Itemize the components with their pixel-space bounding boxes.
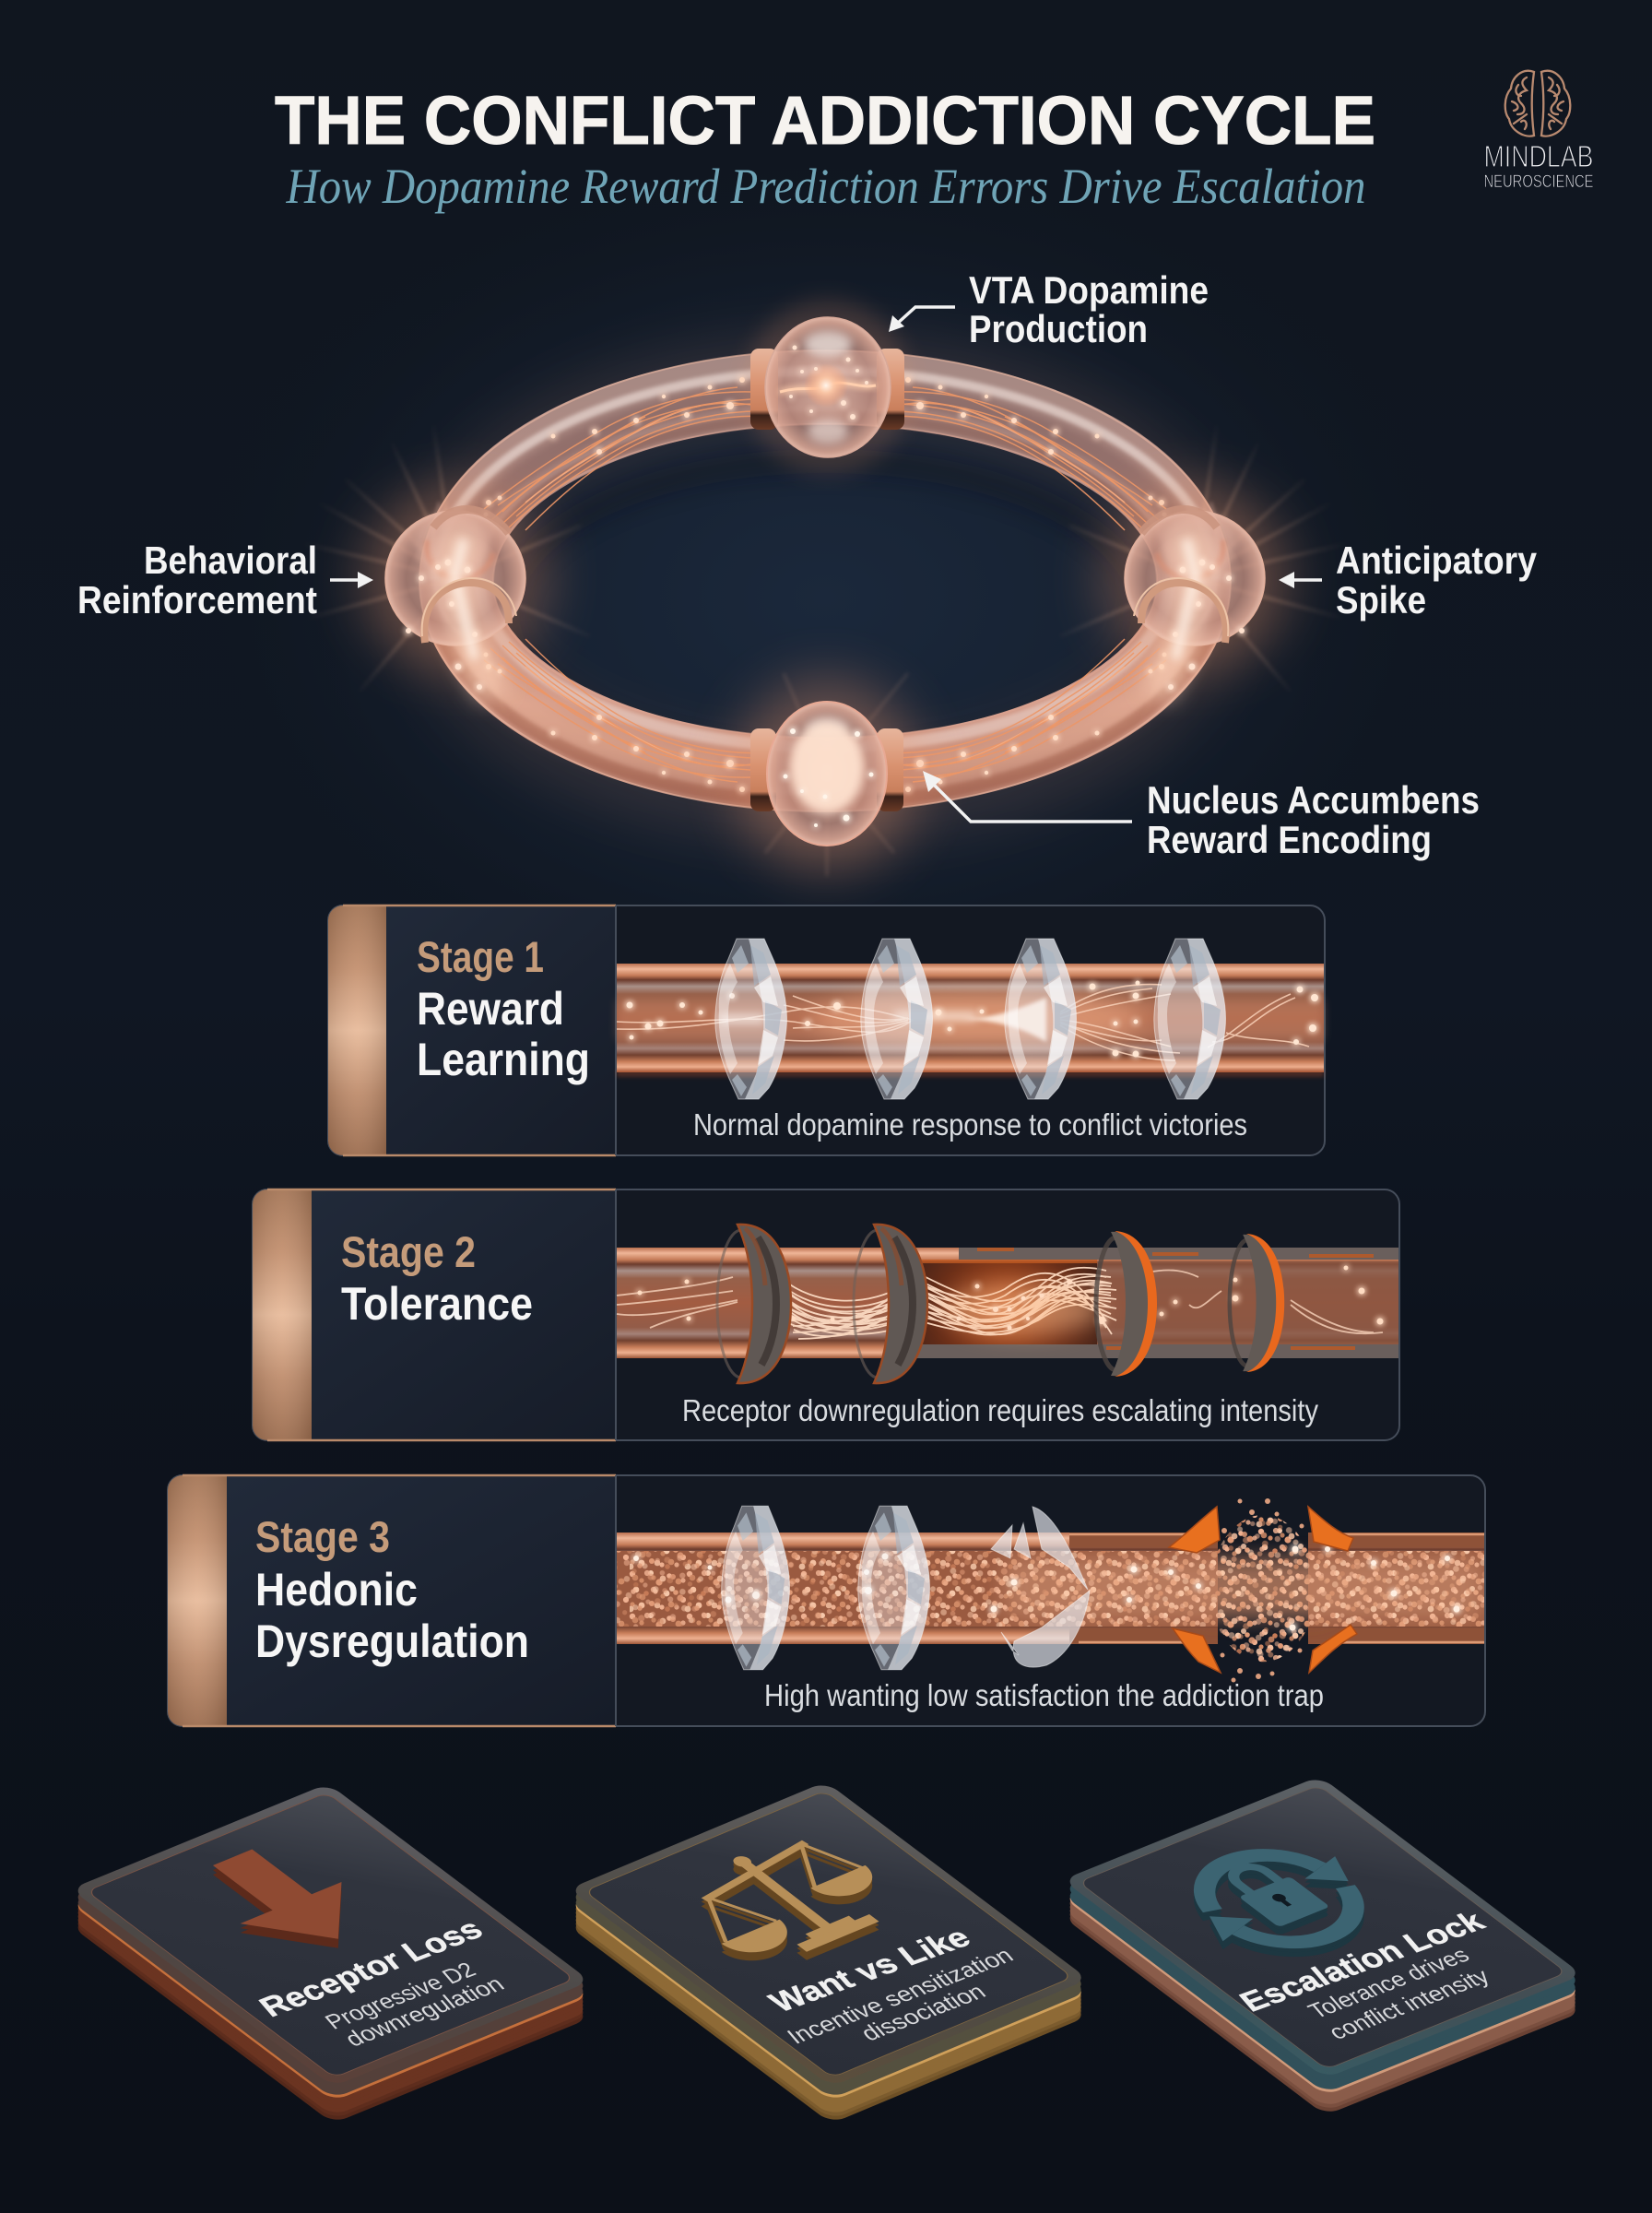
card text: conflict intensity [1323,1964,1495,2044]
card base [1063,1783,1583,2115]
card face [569,1781,1089,2087]
stage 2 caption: Receptor downregulation requires escalating intensity [682,1393,1318,1427]
panel: stage 3 [167,1473,1486,1728]
label: anticipatory spike [1279,538,1538,621]
label: behavioral reinforcement [77,538,373,621]
stage 1 label panel [328,905,616,1155]
title: THE CONFLICT ADDICTION CYCLE [275,82,1375,159]
glass ring receptors [715,939,1225,1099]
icon: down arrow [181,1837,389,1969]
stage 3 label panel [168,1475,616,1726]
stage 2 label panel: Tolerance [341,1278,533,1330]
stage 1 caption: Normal dopamine response to conflict victories [693,1107,1247,1142]
corroded ring receptors [717,1225,1284,1383]
card base [71,1790,590,2124]
card text: downregulation [339,1971,510,2051]
arrow: VTA [889,307,955,332]
stage 1 label panel: Learning [417,1034,590,1085]
icon: balance scales [653,1826,918,1980]
card: want vs like [569,1781,1089,2124]
arrow: anticipatory [1279,572,1322,588]
cycle ring diagram [304,300,1346,876]
card text: Incentive sensitization [782,1943,1019,2049]
text: behavioral: Behavioral [144,538,317,582]
card: receptor loss [71,1783,590,2124]
panel: stage 1 [328,905,1325,1155]
stage 3 label panel: Stage 3 [255,1512,390,1561]
panel: stage 2 [253,1189,1399,1440]
card: escalation lock [1063,1776,1583,2115]
node: nucleus accumbens orb [735,673,919,876]
arrow: behavioral [330,572,373,588]
label: nucleus accumbens [923,771,1480,861]
stage 3 pipe illustration [617,1498,1484,1682]
glass tube ring [419,350,1231,811]
stage 1 pipe illustration [617,939,1324,1099]
stage 3 caption: High wanting low satisfaction the addiction trap [764,1678,1324,1712]
label: VTA dopamine production [889,268,1209,350]
arrow: nucleus accumbens [923,771,1132,822]
ruptured pipe edges [1169,1507,1357,1673]
particle flood [617,1516,1484,1662]
stage 2 pipe illustration [617,1225,1398,1383]
text: nucleus accumbens: Reward Encoding [1147,818,1432,861]
stage 1 label panel: Reward [417,983,564,1035]
intact and shattered glass rings [722,1506,1090,1670]
card text: Tolerance drives [1303,1943,1475,2023]
stage 2 label panel [253,1189,616,1440]
card face [71,1783,590,2087]
text: VTA: Production [969,307,1148,350]
subtitle: How Dopamine Reward Prediction Errors Drive Escalation [286,159,1365,214]
card text: Want vs Like [762,1922,977,2018]
stage 3 label panel: Hedonic [255,1564,418,1615]
text: anticipatory: Spike [1336,578,1426,621]
logo wordmark: MINDLAB [1484,139,1593,173]
node: anticipatory spike orb [1060,424,1346,719]
card text: Escalation Lock [1233,1906,1492,2018]
neural filaments [484,387,1166,782]
icon: padlock in cycle arrows [1156,1832,1401,1974]
stage 2 label panel: Stage 2 [341,1227,476,1276]
twisted filament bundle [784,1268,1116,1339]
card text: dissociation [856,1979,991,2045]
card face [1063,1776,1583,2078]
node: VTA orb [745,300,911,475]
card base [569,1788,1089,2124]
text: nucleus accumbens: Nucleus Accumbens [1147,778,1480,822]
signal particles [483,377,1167,792]
text: behavioral: Reinforcement [77,578,317,621]
logo: MindLab Neuroscience [1484,71,1593,192]
text: anticipatory: Anticipatory [1336,538,1538,582]
stage 1 label panel: Stage 1 [417,932,544,981]
card text: Receptor Loss [253,1913,490,2023]
stage 3 label panel: Dysregulation [255,1615,529,1667]
node: behavioral reinforcement orb [304,424,590,719]
icon: brain [1505,71,1570,136]
text: VTA: VTA Dopamine [969,268,1209,312]
card text: Progressive D2 [320,1958,481,2034]
logo tagline: NEUROSCIENCE [1484,172,1593,192]
